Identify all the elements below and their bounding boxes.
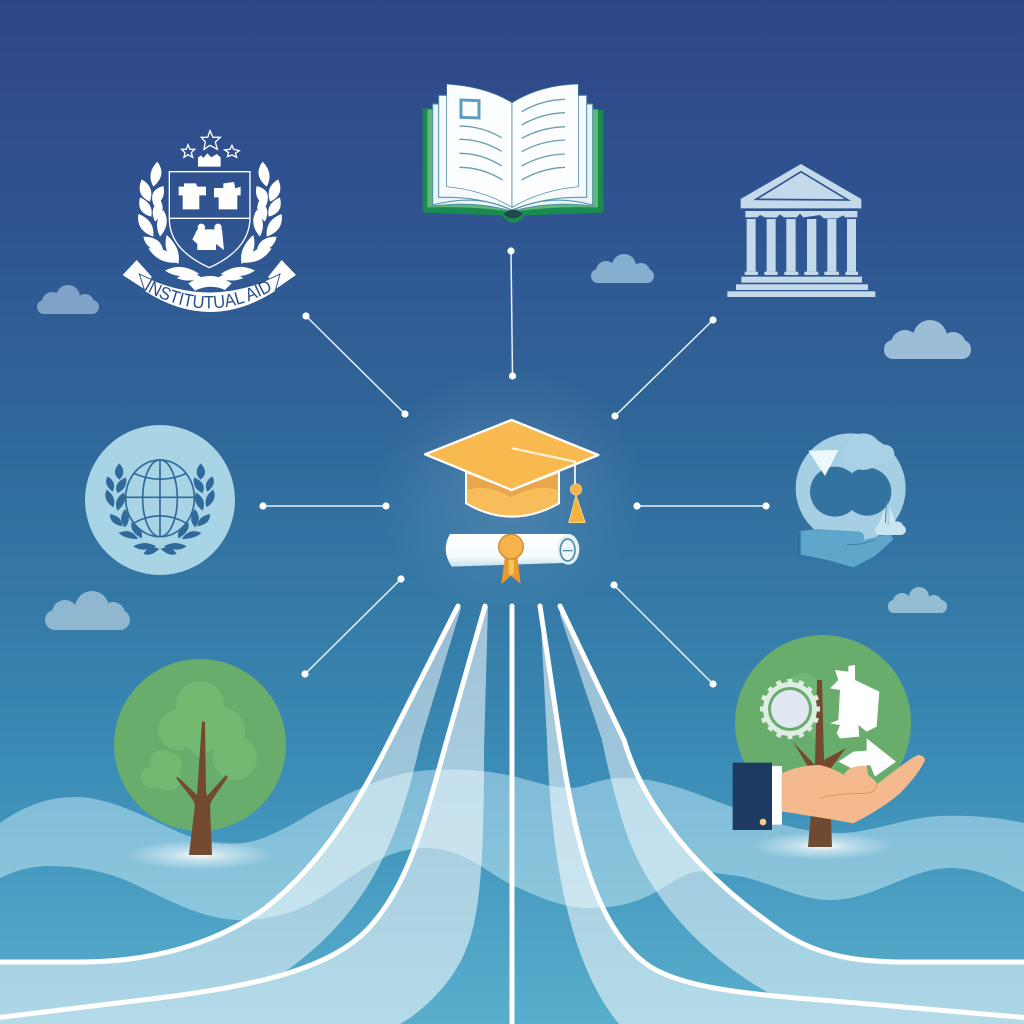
icon: diploma scroll (446, 534, 579, 584)
icon: globe and laurel badge (85, 425, 235, 575)
icon: classical building (727, 164, 875, 297)
rolling hills wave (0, 769, 1024, 920)
icon: right tree with gear, building and hand (733, 635, 925, 860)
building shape and arrow (830, 665, 896, 777)
icon: university crest (122, 129, 296, 313)
cloud: lower left (45, 591, 130, 630)
pathway ribbon C (540, 606, 1024, 1024)
cloud: lower right (888, 587, 947, 613)
icon: open book (423, 84, 603, 223)
pathway ribbon D (560, 606, 1024, 1017)
icon: graduation cap (425, 420, 598, 523)
cloud: upper right (884, 320, 971, 359)
pathway ribbon A (0, 606, 461, 1017)
white pathway lines (0, 606, 1024, 1024)
crest banner (122, 260, 296, 313)
cloud: upper left (37, 285, 99, 314)
icon: left tree in green circle (114, 659, 286, 870)
cloud: top centre (591, 254, 654, 283)
centre glow (375, 365, 645, 615)
connector lines with dots (259, 247, 770, 688)
pathway ribbon B (0, 606, 488, 1024)
hand (733, 755, 925, 830)
crest banner: INSTITUTUAL AID (144, 280, 270, 308)
gear (760, 679, 820, 739)
icon: circular cloud and hand (796, 433, 906, 567)
